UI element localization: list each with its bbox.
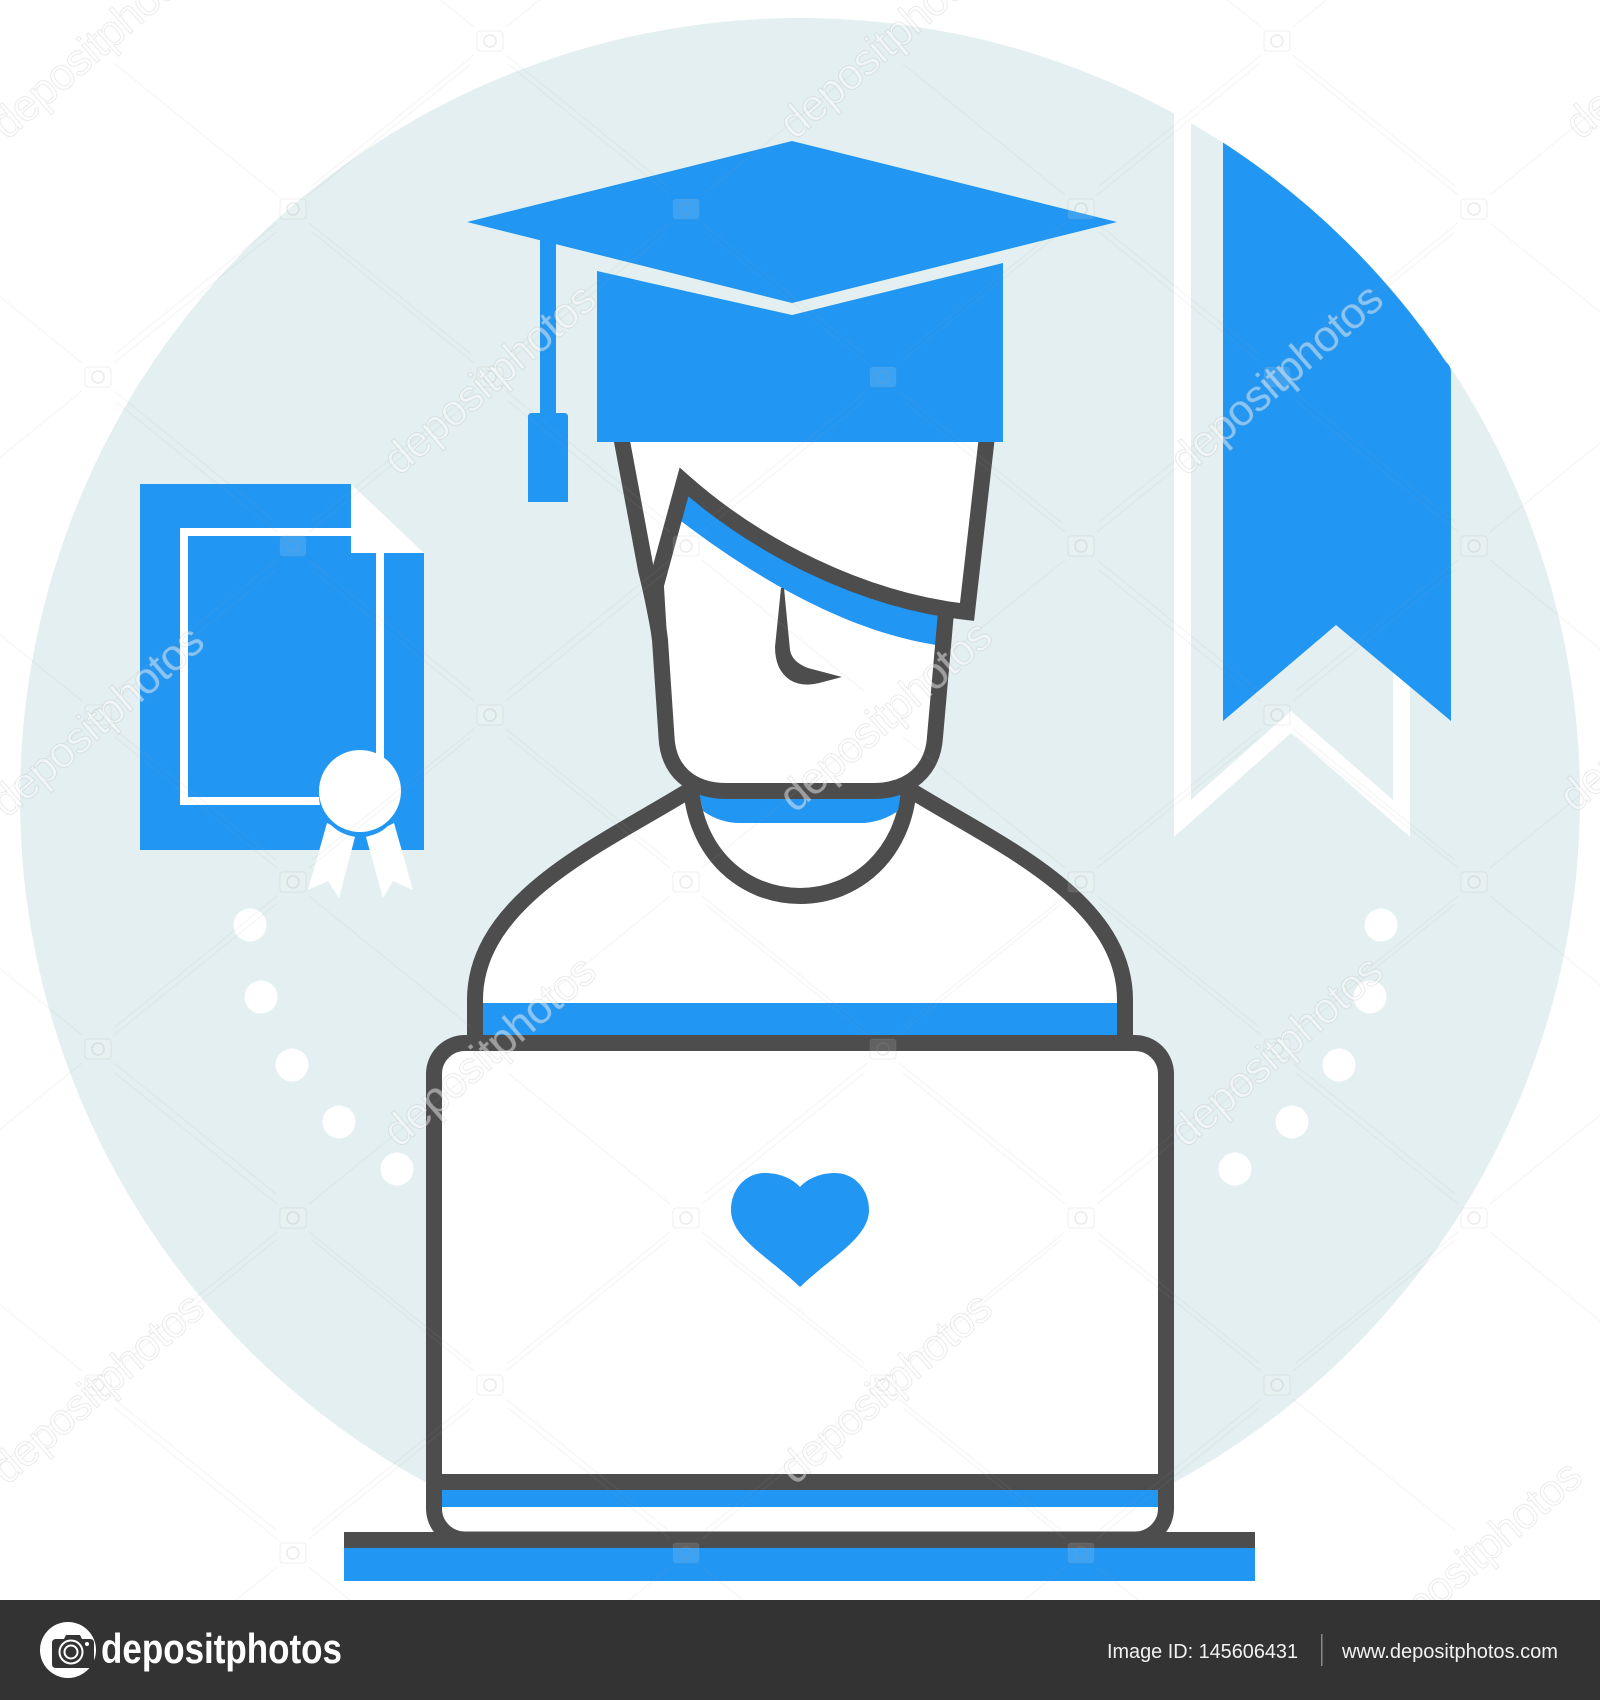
watermark text: depositphotos: [373, 946, 606, 1156]
bookmark white outline: [1174, 100, 1410, 837]
icon: certificate: [140, 484, 424, 898]
laptop hinge line: [434, 1474, 1166, 1490]
cap body: [597, 263, 1003, 442]
certificate sheet: [140, 484, 424, 850]
bookmark blue fill: [1223, 142, 1451, 721]
seal: [319, 750, 401, 832]
footer divider: [1321, 1634, 1322, 1666]
certificate ribbon tails: [308, 823, 413, 898]
watermark text: depositphotos: [373, 274, 606, 484]
laptop blue stripe: [442, 1490, 1158, 1507]
tassel cord: [540, 238, 556, 418]
watermark text: depositphotos: [769, 611, 1002, 821]
image id: Image ID: 145606431: [1107, 1641, 1298, 1663]
logo wordmark: depositphotos: [101, 1625, 342, 1672]
certificate inner frame: [184, 532, 380, 801]
seal shadow: [319, 755, 401, 837]
website: www.depositphotos.com: [1341, 1641, 1558, 1663]
laptop body: [434, 1043, 1166, 1540]
desk dark line: [344, 1532, 1255, 1549]
watermark text: depositphotos: [1359, 1451, 1592, 1661]
icon: camera badge: [40, 1622, 96, 1678]
hair line: [656, 436, 987, 612]
watermark text: depositphotos: [1160, 946, 1393, 1156]
cap board: [467, 141, 1117, 303]
decorative dots left: [234, 908, 414, 1186]
neck: [691, 785, 909, 896]
shoulders: [475, 793, 1125, 1045]
watermark text: depositphotos: [1160, 274, 1393, 484]
head fill: [621, 436, 987, 791]
figure: head: [621, 436, 987, 791]
footer logo: [40, 1622, 342, 1678]
neck blue shadow: [699, 792, 901, 823]
desk blue line: [344, 1548, 1255, 1581]
watermark text: depositphotos: [769, 1283, 1002, 1493]
decorative dots right: [1218, 908, 1398, 1186]
icon: bookmark ribbon: [1174, 100, 1451, 837]
figure: student torso: [475, 785, 1125, 1045]
torso blue stripe: [483, 1003, 1117, 1036]
icon: heart: [731, 1173, 869, 1287]
forehead blue shadow: [681, 482, 946, 645]
hair and temple join: [640, 565, 667, 637]
icon: laptop: [344, 1043, 1255, 1581]
head outline: [621, 436, 946, 791]
icon: graduation cap: [467, 141, 1117, 502]
tassel: [528, 413, 568, 502]
footer bar: [0, 1600, 1600, 1700]
certificate folded corner: [351, 484, 424, 553]
nose: [775, 588, 842, 685]
